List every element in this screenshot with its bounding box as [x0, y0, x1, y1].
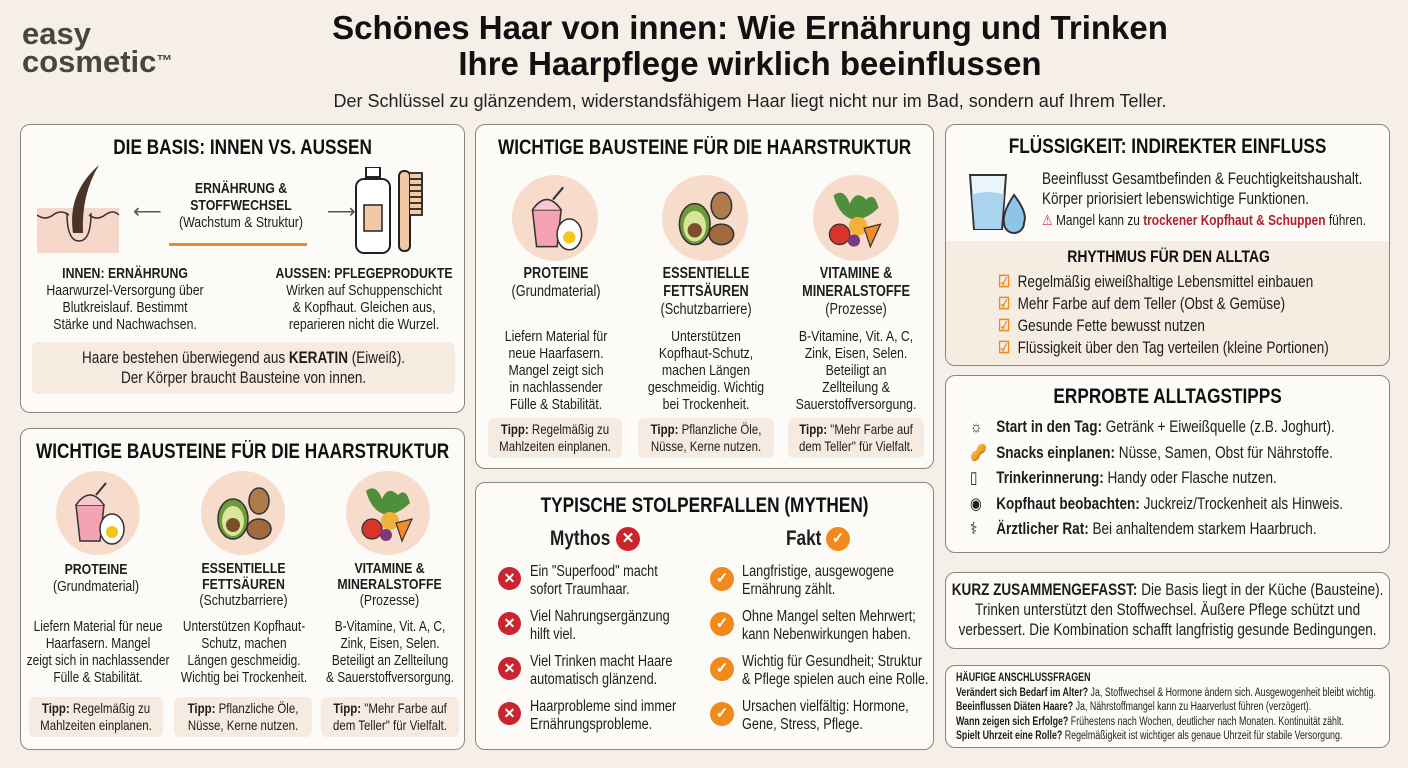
- tips list: Ärztlicher Rat: Bei anhaltendem starkem Haarbruch.: [996, 520, 1317, 538]
- panel: bausteine middle: bei Trockenheit.: [663, 396, 749, 413]
- text: aussen: Wirken auf Schuppenschicht: [286, 282, 442, 299]
- icon: protein shake: [512, 175, 598, 261]
- panel: bausteine left: B-Vitamine, Vit. A, C,: [335, 619, 445, 635]
- column 3: VITAMINE &: [354, 560, 425, 577]
- checklist: ☑ Mehr Farbe auf dem Teller (Obst & Gemüse): [998, 295, 1285, 313]
- panel: kurz zusammengefasst: verbessert. Die Kombination schafft langfristig gesunde Bedingungen.: [959, 621, 1377, 639]
- panel: mythen: Ohne Mangel selten Mehrwert;: [742, 608, 916, 625]
- panel: kurz zusammengefasst: Trinken unterstützt den Stoffwechsel. Äußere Pflege schützt und: [975, 601, 1360, 619]
- panel: bausteine left: & Sauerstoffversorgung.: [326, 670, 454, 686]
- tips list: 🥜: [970, 444, 987, 462]
- tip 2: Tipp: Pflanzliche Öle,: [188, 700, 298, 716]
- tip 1: Mahlzeiten einplanen.: [40, 717, 152, 733]
- text: Beeinflusst Gesamtbefinden & Feuchtigkeitshaushalt.: [1042, 170, 1362, 188]
- panel: bausteine middle: Liefern Material für: [505, 328, 607, 345]
- tips list: ⚕: [970, 520, 977, 538]
- panel: kurz zusammengefasst: [945, 572, 1390, 649]
- warning: ⚠ Mangel kann zu trockener Kopfhaut & Schuppen führen.: [1042, 213, 1366, 229]
- panel: mythen: [475, 482, 934, 750]
- text: Körper priorisiert lebenswichtige Funktionen.: [1042, 190, 1309, 208]
- panel: mythen: sofort Traumhaar.: [530, 581, 630, 598]
- panel: mythen: Ernährung zählt.: [742, 581, 835, 598]
- tip 1: Tipp: Regelmäßig zu: [42, 700, 150, 716]
- panel: kurz zusammengefasst: KURZ ZUSAMMENGEFASST: Die Basis liegt in der Küche (Bausteine).: [952, 581, 1383, 599]
- panel: bausteine left: zeigt sich in nachlassender: [27, 653, 169, 669]
- heading: WICHTIGE BAUSTEINE FÜR DIE HAARSTRUKTUR: [498, 136, 911, 159]
- tips list: [970, 418, 1343, 538]
- heading: TYPISCHE STOLPERFALLEN (MYTHEN): [541, 494, 869, 517]
- column 2: [660, 265, 752, 318]
- tip 1: Tipp: Regelmäßig zu: [501, 421, 609, 437]
- panel: mythen: ✓: [716, 660, 728, 677]
- panel: bausteine middle: Zellteilung &: [822, 379, 890, 396]
- fakt header: ✓: [832, 530, 844, 547]
- column 1: [512, 265, 601, 300]
- panel: bausteine middle: neue Haarfasern.: [509, 345, 604, 362]
- checklist: ☑ Regelmäßig eiweißhaltige Lebensmittel einbauen: [998, 273, 1313, 291]
- text: innen: Stärke und Nachwachsen.: [53, 316, 197, 333]
- tip 3: dem Teller" für Vielfalt.: [799, 438, 913, 454]
- tips list: ☼: [970, 418, 982, 436]
- tip 2: Nüsse, Kerne nutzen.: [651, 438, 761, 454]
- mythos header: [550, 527, 640, 551]
- panel: bausteine middle: in nachlassender: [510, 379, 603, 396]
- text: aussen: [276, 265, 453, 333]
- fakt header: [786, 527, 850, 551]
- panel: mythen: Wichtig für Gesundheit; Struktur: [742, 653, 922, 670]
- mythos header: ✕: [622, 530, 634, 547]
- column 2: (Schutzbarriere): [199, 592, 288, 609]
- panel: bausteine left: Haarfasern. Mangel: [46, 636, 150, 652]
- panel: basis innen vs aussen: [20, 124, 465, 413]
- tip 2: Nüsse, Kerne nutzen.: [188, 717, 298, 733]
- tip 3: dem Teller" für Vielfalt.: [333, 717, 447, 733]
- column 1: PROTEINE: [65, 561, 127, 578]
- tip 1: [29, 697, 163, 737]
- column 3: [802, 265, 910, 318]
- mythos header: Mythos: [550, 527, 610, 550]
- tips list: Trinkerinnerung: Handy oder Flasche nutzen.: [996, 469, 1277, 487]
- icon: vegetables: [346, 471, 430, 555]
- checklist: [998, 273, 1329, 357]
- panel: anschlussfragen: Beeinflussen Diäten Haare? Ja, Nährstoffmangel kann zu Haarverlust führen (verzögert).: [956, 701, 1311, 713]
- icon: bottle and comb: [355, 167, 423, 254]
- column 1: (Grundmaterial): [512, 283, 601, 300]
- panel: flüssigkeit: [945, 124, 1390, 366]
- checklist: ☑ Flüssigkeit über den Tag verteilen (kleine Portionen): [998, 339, 1329, 357]
- panel: mythen: ✓: [716, 615, 728, 632]
- tip 2: [174, 697, 312, 737]
- icon: avocado nuts: [201, 471, 285, 555]
- panel: bausteine middle: Sauerstoffversorgung.: [796, 396, 916, 413]
- column 1: PROTEINE: [524, 265, 589, 282]
- column 3: (Prozesse): [825, 301, 887, 318]
- column 2: ESSENTIELLE: [663, 265, 749, 282]
- heading: FLÜSSIGKEIT: INDIREKTER EINFLUSS: [1009, 135, 1326, 158]
- panel: mythen: ✕: [504, 615, 515, 631]
- keratin box: Der Körper braucht Bausteine von innen.: [121, 369, 366, 387]
- icon: avocado nuts: [662, 175, 748, 261]
- rhythmus section: [946, 241, 1391, 367]
- panel: bausteine left: Wichtig bei Trockenheit.: [181, 670, 307, 686]
- tip 3: [321, 697, 459, 737]
- text: innen: Haarwurzel-Versorgung über: [46, 282, 204, 299]
- panel: mythen: kann Nebenwirkungen haben.: [742, 626, 911, 643]
- tip 1: [488, 418, 622, 458]
- divider orange: [169, 243, 307, 246]
- text: innen: [46, 265, 204, 333]
- heading: WICHTIGE BAUSTEINE FÜR DIE HAARSTRUKTUR: [36, 440, 449, 463]
- text: aussen: & Kopfhaut. Gleichen aus,: [293, 299, 435, 316]
- myth list: [498, 563, 676, 733]
- panel: bausteine left: Fülle & Stabilität.: [53, 670, 143, 686]
- panel: bausteine middle: Kopfhaut-Schutz,: [659, 345, 753, 362]
- panel: anschlussfragen: [945, 665, 1390, 748]
- keratin box: Haare bestehen überwiegend aus KERATIN (Eiweiß).: [82, 349, 405, 367]
- panel: bausteine left: Unterstützen Kopfhaut-: [183, 619, 305, 635]
- fact list: [710, 563, 929, 733]
- text: aussen: reparieren nicht die Wurzel.: [289, 316, 439, 333]
- panel: mythen: Ein "Superfood" macht: [530, 563, 658, 580]
- tip 3: Tipp: "Mehr Farbe auf: [799, 421, 913, 437]
- panel: bausteine middle: Beteiligt an: [826, 362, 886, 379]
- center label: ERNÄHRUNG &: [195, 180, 287, 197]
- panel: bausteine left: Zink, Eisen, Selen.: [340, 636, 440, 652]
- column 2: FETTSÄUREN: [202, 576, 285, 593]
- text: [1042, 170, 1362, 208]
- arrow right: ⟶: [327, 201, 356, 223]
- title: Ihre Haarpflege wirklich beeinflussen: [458, 45, 1042, 82]
- panel: bausteine middle: Zink, Eisen, Selen.: [805, 345, 907, 362]
- subheading: RHYTHMUS FÜR DEN ALLTAG: [1067, 247, 1270, 266]
- tip 3: Tipp: "Mehr Farbe auf: [333, 700, 447, 716]
- panel: mythen: Ursachen vielfältig: Hormone,: [742, 698, 909, 715]
- panel: bausteine middle: [475, 124, 934, 469]
- panel: bausteine middle: geschmeidig. Wichtig: [648, 379, 764, 396]
- panel: mythen: ✓: [716, 705, 728, 722]
- subtitle: Der Schlüssel zu glänzendem, widerstandsfähigem Haar liegt nicht nur im Bad, sondern auf Ihrem Teller.: [333, 91, 1167, 111]
- center label: (Wachstum & Struktur): [179, 214, 303, 231]
- fakt header: Fakt: [786, 527, 821, 550]
- tips list: ▯: [970, 469, 977, 487]
- center label: [179, 180, 303, 231]
- column 2: (Schutzbarriere): [660, 301, 752, 318]
- panel: mythen: & Pflege spielen auch eine Rolle.: [742, 671, 929, 688]
- logo: easy: [22, 16, 91, 51]
- title: Schönes Haar von innen: Wie Ernährung und Trinken: [332, 9, 1168, 46]
- panel: bausteine middle: Mangel zeigt sich: [509, 362, 604, 379]
- panel: bausteine left: Liefern Material für neue: [34, 619, 162, 635]
- text: innen: Blutkreislauf. Bestimmt: [62, 299, 188, 316]
- logo: cosmetic™: [22, 44, 172, 79]
- panel: mythen: Haarprobleme sind immer: [530, 698, 676, 715]
- checklist: ☑ Gesunde Fette bewusst nutzen: [998, 317, 1205, 335]
- panel: mythen: hilft viel.: [530, 626, 576, 643]
- panel: bausteine left: Beteiligt an Zellteilung: [332, 653, 448, 669]
- arrow left: ⟵: [133, 201, 162, 223]
- text: innen: INNEN: ERNÄHRUNG: [62, 265, 188, 282]
- panel: mythen: ✓: [716, 570, 728, 587]
- panel: bausteine middle: Unterstützen: [671, 328, 741, 345]
- column 3: (Prozesse): [360, 592, 419, 609]
- panel: bausteine left: [20, 428, 465, 750]
- tip 1: Mahlzeiten einplanen.: [499, 438, 611, 454]
- column 1: (Grundmaterial): [53, 578, 139, 595]
- tip 2: Tipp: Pflanzliche Öle,: [651, 421, 761, 437]
- tip 2: [638, 418, 774, 458]
- panel: bausteine middle: Fülle & Stabilität.: [510, 396, 602, 413]
- title: [332, 9, 1168, 82]
- panel: anschlussfragen: Spielt Uhrzeit eine Rolle? Regelmäßigkeit ist wichtiger als genaue Uhrzeit für stabile Versorgung.: [956, 730, 1342, 742]
- panel: anschlussfragen: Verändert sich Bedarf im Alter? Ja, Stoffwechsel & Hormone ändern sich. Ausgewogenheit bleibt wichtig.: [956, 686, 1376, 698]
- icon: protein shake: [56, 471, 140, 555]
- panel: mythen: Langfristige, ausgewogene: [742, 563, 894, 580]
- heading: ERPROBTE ALLTAGSTIPPS: [1053, 385, 1282, 408]
- panel: mythen: Gene, Stress, Pflege.: [742, 716, 863, 733]
- panel: bausteine left: Längen geschmeidig.: [188, 653, 301, 669]
- tips list: Start in den Tag: Getränk + Eiweißquelle (z.B. Joghurt).: [996, 418, 1335, 436]
- tips list: ◉: [970, 494, 982, 512]
- icon: water glass and drop: [968, 174, 1026, 234]
- panel: mythen: ✕: [504, 705, 515, 721]
- panel: anschlussfragen: HÄUFIGE ANSCHLUSSFRAGEN: [956, 672, 1090, 684]
- panel: mythen: Viel Nahrungsergänzung: [530, 608, 670, 625]
- panel: alltagstipps: [945, 375, 1390, 553]
- heading: DIE BASIS: INNEN VS. AUSSEN: [113, 136, 372, 159]
- tips list: Kopfhaut beobachten: Juckreiz/Trockenheit als Hinweis.: [996, 494, 1343, 512]
- column 3: [337, 560, 442, 609]
- panel: anschlussfragen: Wann zeigen sich Erfolge? Frühestens nach Wochen, deutlicher nach Monaten. Kontinuität zählt.: [956, 716, 1344, 728]
- tip 3: [788, 418, 924, 458]
- panel: bausteine middle: machen Längen: [662, 362, 750, 379]
- panel: mythen: automatisch glänzend.: [530, 671, 657, 688]
- column 2: [199, 560, 288, 609]
- panel: mythen: Viel Trinken macht Haare: [530, 653, 672, 670]
- column 3: MINERALSTOFFE: [802, 283, 910, 300]
- column 2: ESSENTIELLE: [201, 560, 286, 577]
- column 3: MINERALSTOFFE: [337, 576, 442, 593]
- icon: hair root: [37, 165, 120, 253]
- panel: mythen: ✕: [504, 570, 515, 586]
- logo: [22, 16, 172, 79]
- text: aussen: AUSSEN: PFLEGEPRODUKTE: [276, 265, 453, 282]
- keratin box: [32, 342, 455, 394]
- panel: bausteine middle: B-Vitamine, Vit. A, C,: [799, 328, 913, 345]
- panel: bausteine left: Schutz, machen: [201, 636, 287, 652]
- panel: mythen: Ernährungsprobleme.: [530, 716, 652, 733]
- icon: vegetables: [813, 175, 899, 261]
- column 3: VITAMINE &: [820, 265, 892, 282]
- column 1: [53, 561, 139, 595]
- panel: mythen: ✕: [504, 660, 515, 676]
- column 2: FETTSÄUREN: [663, 283, 749, 300]
- tips list: Snacks einplanen: Nüsse, Samen, Obst für Nährstoffe.: [996, 444, 1333, 462]
- center label: STOFFWECHSEL: [190, 197, 292, 214]
